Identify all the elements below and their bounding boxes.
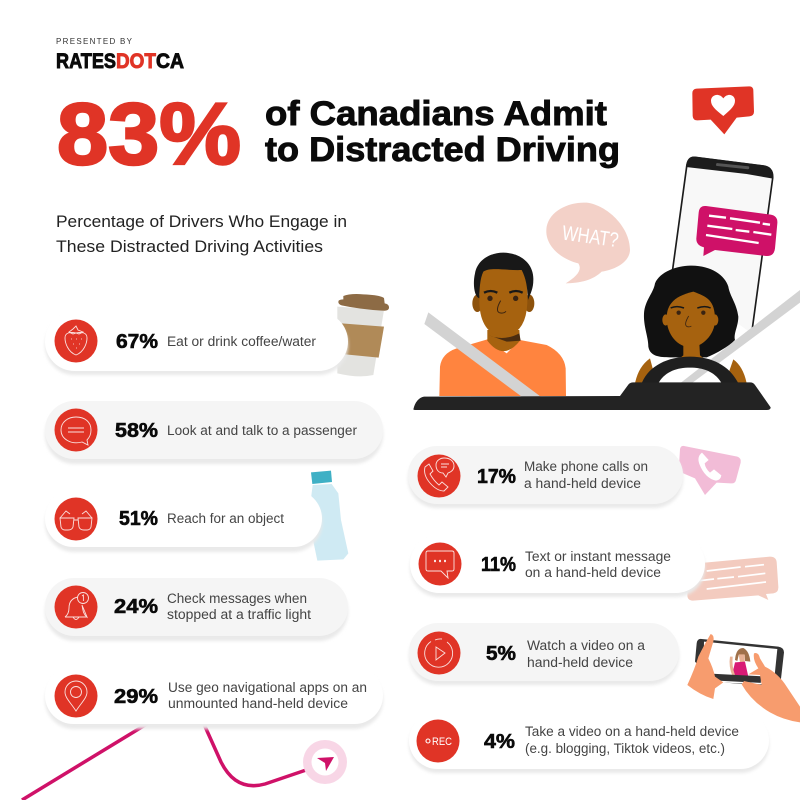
illustration: drivers in car bbox=[413, 86, 800, 410]
steering wheel bbox=[642, 357, 738, 383]
title: to Distracted Driving bbox=[265, 131, 620, 169]
pill: 11% text or instant message: Text or instant message bbox=[525, 549, 671, 564]
presented by label: PRESENTED BY bbox=[56, 37, 133, 46]
speech bubble: WHAT? bbox=[546, 203, 630, 283]
pill: 17% phone calls: a hand-held device bbox=[524, 476, 641, 491]
title: of Canadians Admit bbox=[265, 95, 607, 133]
subheading: Percentage of Drivers Who Engage in bbox=[56, 212, 347, 231]
icon: phone and chat bbox=[425, 458, 454, 491]
pill: 67% eat or drink bbox=[45, 312, 348, 375]
pill: 11% text or instant message bbox=[410, 535, 705, 597]
pill: 17% phone calls: Make phone calls on bbox=[524, 459, 648, 474]
map pin marker bbox=[303, 740, 347, 784]
icon: glasses bbox=[60, 511, 92, 530]
pill: 17% phone calls bbox=[408, 446, 683, 508]
seat belt: man bbox=[424, 312, 541, 397]
car dashboard bbox=[413, 382, 771, 410]
pill: 11% text or instant message: on a hand-held device bbox=[525, 565, 661, 580]
icon: location pin bbox=[65, 681, 87, 711]
map route lines bbox=[22, 722, 312, 800]
pill: 29% geo navigation: unmounted hand-held device bbox=[168, 696, 348, 711]
subheading bbox=[56, 212, 347, 256]
illustration: hands holding phone bbox=[687, 634, 800, 722]
pill: 5% watch a video: hand-held device bbox=[527, 655, 633, 670]
pill: 67% eat or drink: Eat or drink coffee/water bbox=[167, 334, 317, 349]
pill: 24% check messages: 24% bbox=[114, 596, 158, 618]
pill: 67% eat or drink: 67% bbox=[116, 331, 158, 353]
pill: 29% geo navigation: Use geo navigational apps on an bbox=[168, 680, 367, 695]
icon: bell with badge bbox=[65, 592, 88, 620]
pill: 58% look at and talk: 58% bbox=[115, 420, 158, 442]
illustration: coffee cup bbox=[337, 294, 389, 376]
pill: 51% reach for an object: 51% bbox=[119, 508, 158, 530]
logo: RATESDOTCA: DOT bbox=[116, 49, 156, 73]
icon: REC label bbox=[426, 736, 452, 748]
pill: 5% watch a video bbox=[409, 623, 679, 685]
man: passenger bbox=[439, 253, 566, 396]
speech bubble: WHAT?: WHAT? bbox=[561, 222, 620, 252]
pill: 5% watch a video: Watch a video on a bbox=[527, 638, 645, 653]
pill: 51% reach for an object bbox=[45, 490, 322, 552]
icon: speech bubble bbox=[61, 417, 91, 445]
pill: 24% check messages: stopped at a traffic light bbox=[167, 607, 311, 622]
title bbox=[265, 95, 620, 169]
phone outline bbox=[672, 157, 773, 333]
pill: 17% phone calls: 17% bbox=[477, 466, 516, 488]
logo: RATESDOTCA: CA bbox=[156, 49, 184, 73]
subheading: These Distracted Driving Activities bbox=[56, 237, 323, 256]
pill: 58% look at and talk: Look at and talk to a passenger bbox=[167, 423, 357, 438]
icon: play circle bbox=[425, 639, 453, 667]
message bubble on phone bbox=[696, 206, 777, 256]
icon: heart notification bubble bbox=[692, 86, 754, 134]
pill: 24% check messages: Check messages when bbox=[167, 591, 307, 606]
headline number: 83%: 83% bbox=[57, 86, 241, 183]
pill: 24% check messages bbox=[45, 578, 348, 641]
pill: 4% take a video bbox=[409, 712, 769, 773]
pill: 51% reach for an object: Reach for an object bbox=[167, 511, 284, 526]
icon: strawberry bbox=[65, 326, 87, 355]
illustration: water bottle bbox=[310, 471, 348, 561]
phone frame bbox=[695, 639, 784, 686]
woman: driver bbox=[635, 266, 800, 383]
pill: 58% look at and talk bbox=[45, 401, 383, 464]
pill: 4% take a video: 4% bbox=[484, 731, 515, 753]
icon: REC label: REC bbox=[432, 736, 452, 748]
illustration: pink phone bubble bbox=[679, 446, 741, 495]
hands bbox=[687, 634, 800, 722]
pill: 4% take a video: (e.g. blogging, Tiktok videos, etc.) bbox=[525, 741, 725, 756]
video: woman at keyboard bbox=[713, 648, 761, 683]
logo: RATESDOTCA: RATES bbox=[56, 49, 116, 73]
illustration: peach message bubble bbox=[687, 557, 778, 601]
icon: message box bbox=[426, 551, 454, 578]
pill: 11% text or instant message: 11% bbox=[481, 554, 516, 576]
pill: 4% take a video: Take a video on a hand-held device bbox=[525, 724, 739, 739]
pill: 29% geo navigation bbox=[45, 667, 383, 729]
pill: 29% geo navigation: 29% bbox=[114, 686, 158, 708]
logo: RATESDOTCA bbox=[56, 49, 184, 73]
pill: 5% watch a video: 5% bbox=[486, 643, 516, 665]
